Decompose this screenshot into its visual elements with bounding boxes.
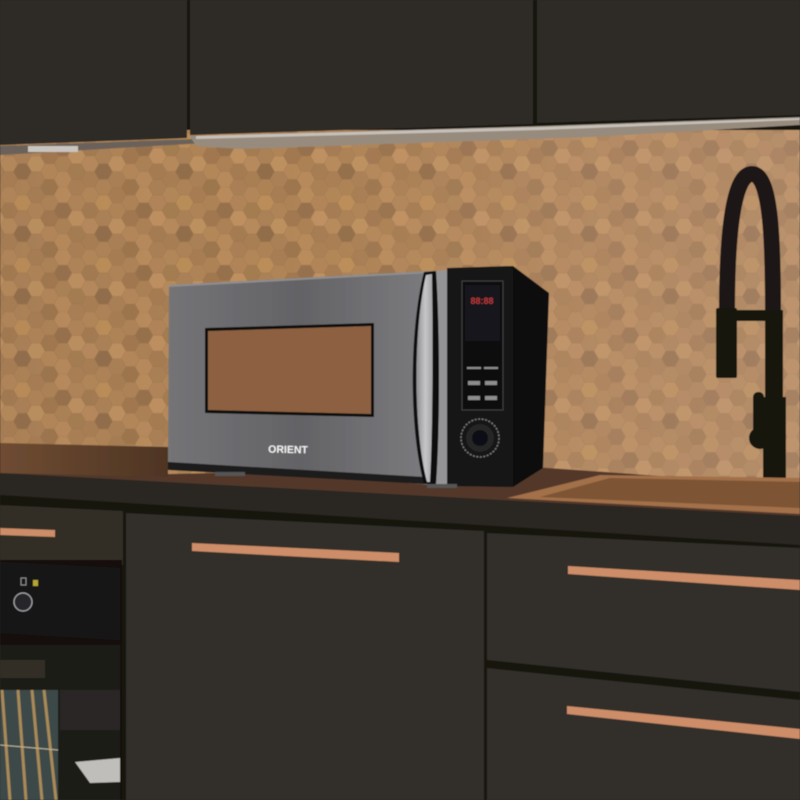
door handle: [413, 270, 447, 484]
right lower drawer: [487, 668, 800, 800]
backsplash: hexagon tiles: [0, 130, 800, 490]
center door: [126, 513, 484, 800]
cooktop: [0, 443, 168, 477]
upper cabinets: [0, 0, 800, 145]
under-cabinet light strip: [0, 117, 800, 155]
microwave feet: [215, 472, 457, 488]
oven knob: [14, 578, 38, 611]
oven glass reflection: [0, 645, 120, 800]
countertop: [0, 466, 800, 548]
oven control panel: [0, 562, 120, 640]
control dial: [461, 419, 499, 457]
microwave door: [168, 271, 432, 485]
microwave window: [205, 323, 374, 417]
microwave: [168, 266, 549, 488]
display digits: 88:88: [470, 296, 494, 306]
copper handles: [0, 528, 800, 739]
door bottom trim: [168, 462, 425, 484]
control panel: [447, 266, 513, 487]
faucet: [716, 174, 790, 485]
display screen: [465, 285, 500, 341]
microwave side: [513, 266, 549, 487]
left drawer: [0, 505, 123, 565]
brand logo: ORIENT: [268, 444, 309, 456]
oven: [0, 560, 122, 800]
lower cabinets: [0, 495, 800, 800]
button labels: [467, 367, 498, 400]
right upper drawer: [487, 533, 800, 692]
display frame: [462, 281, 503, 410]
sink: [507, 475, 800, 514]
